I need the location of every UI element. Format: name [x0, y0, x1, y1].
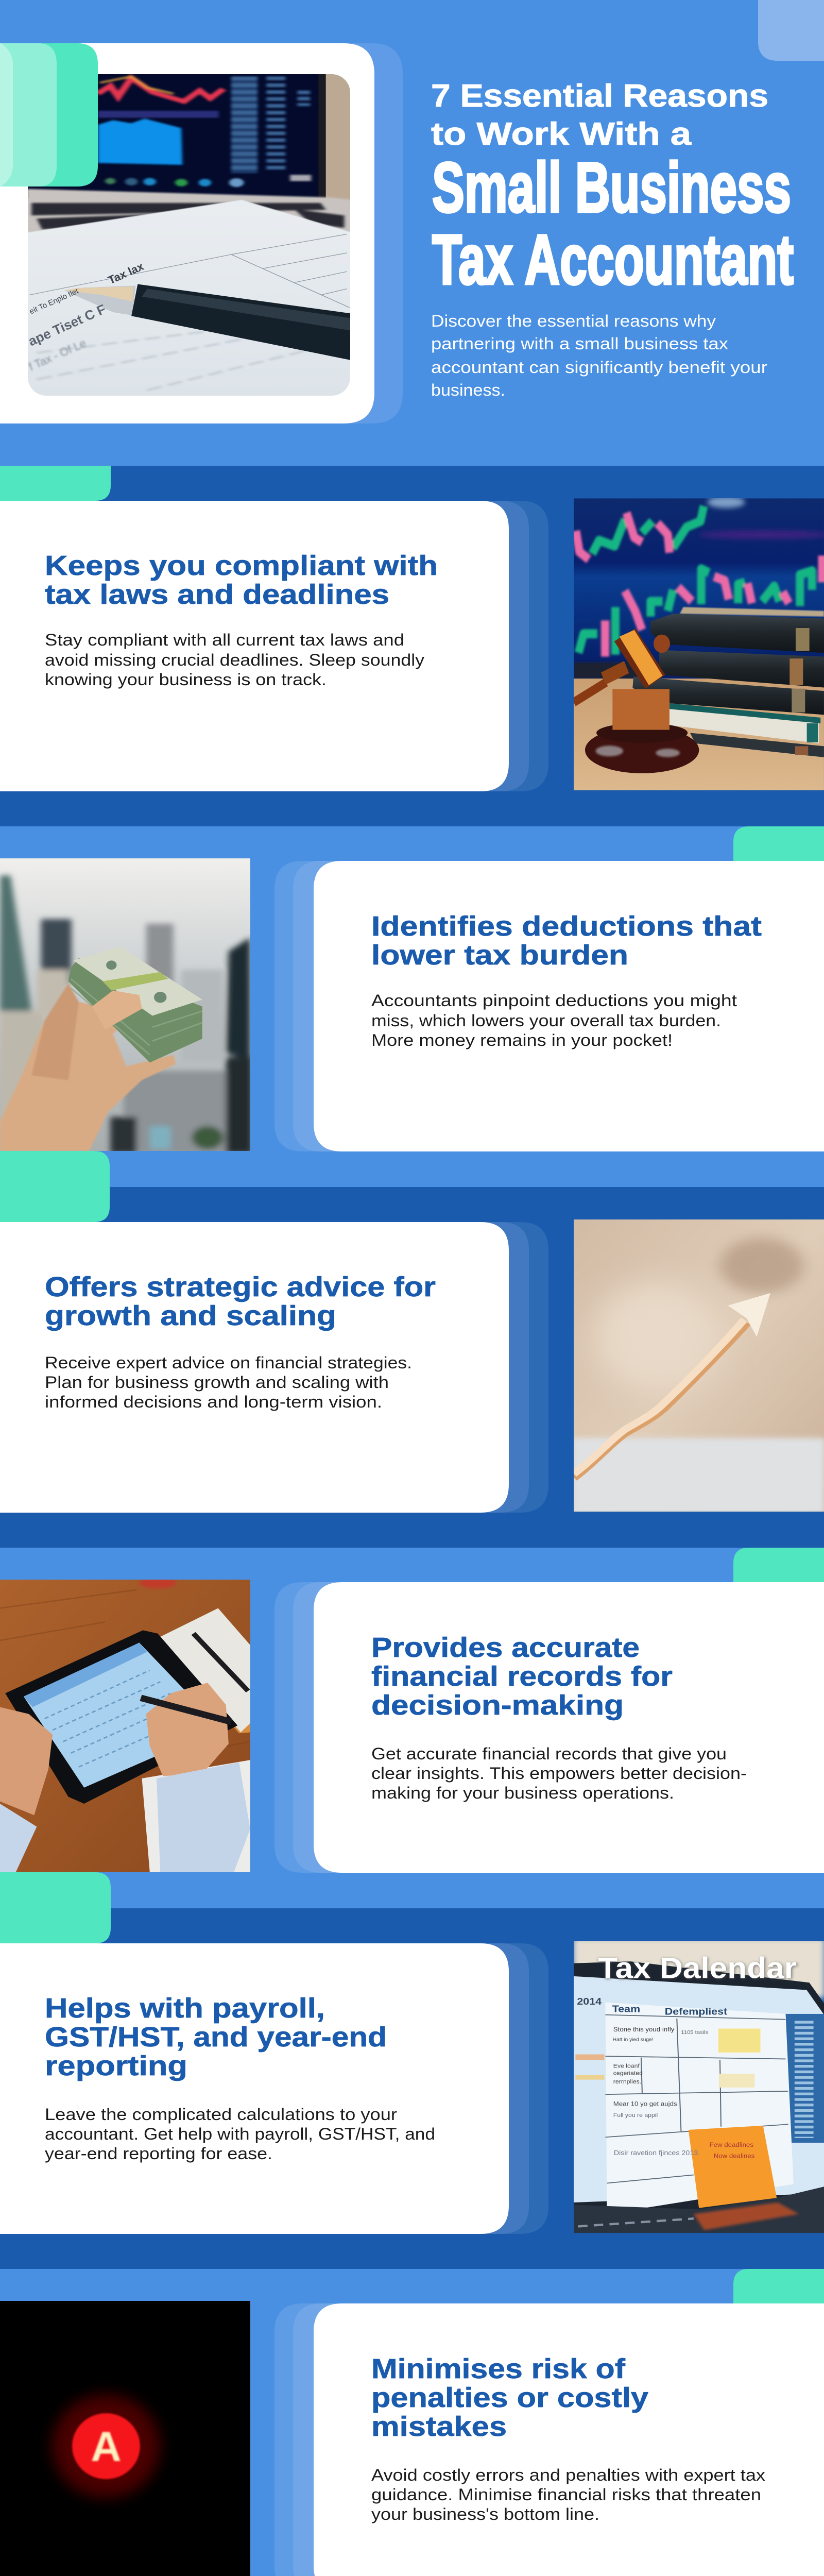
heading: reporting: [45, 2050, 187, 2081]
body text: Get accurate financial records that give you: [371, 1744, 727, 1763]
photo: gavel and books: [574, 497, 824, 790]
heading: mistakes: [371, 2411, 507, 2442]
photo: tax calendar on laptop: [573, 1938, 824, 2235]
heading: Identifies deductions that: [371, 911, 762, 942]
photo: tax calendar on laptop: Now dealines: [714, 2153, 754, 2159]
body text: [45, 1353, 412, 1411]
header description: Discover the essential reasons why: [431, 312, 716, 330]
card: [274, 1582, 824, 1873]
body text: Receive expert advice on financial strategies.: [45, 1353, 412, 1372]
title: [431, 78, 794, 299]
photo: tax calendar on laptop: Tax Dalendar: [598, 1953, 798, 1986]
panel: reason 4: [0, 1548, 824, 1874]
heading: Keeps you compliant with: [45, 550, 438, 581]
heading: [45, 550, 438, 610]
body text: Avoid costly errors and penalties with expert tax: [371, 2466, 765, 2484]
mint tab: [0, 1151, 110, 1222]
heading: Provides accurate: [371, 1632, 640, 1663]
heading: tax laws and deadlines: [45, 579, 389, 610]
title: 7 Essential Reasons: [431, 78, 768, 114]
heading: [371, 1632, 673, 1721]
card: [274, 2303, 824, 2576]
photo: tablet spreadsheet on desk: [0, 1578, 252, 1874]
photo: tax calendar on laptop: Full you re appil: [613, 2113, 658, 2119]
photo: hand holding cash: [0, 858, 252, 1154]
body text: miss, which lowers your overall tax burden.: [371, 1011, 721, 1030]
heading: [371, 2353, 648, 2442]
photo: tax form with pen and laptop: Tax lax: [106, 260, 146, 287]
photo: tax calendar on laptop: Eve loanf: [613, 2063, 640, 2069]
decorative tab: top right: [758, 0, 824, 61]
mint tab: [0, 466, 111, 501]
photo: tax form with pen and laptop: ape Tiset C F: [26, 301, 108, 349]
photo: tax calendar on laptop: Tax Dalendar: [598, 1952, 797, 1985]
body text: your business's bottom line.: [371, 2505, 599, 2523]
heading: Minimises risk of: [371, 2353, 626, 2384]
mint tab: [733, 1548, 824, 1582]
panel: reason 2: [0, 826, 824, 1154]
body text: Plan for business growth and scaling with: [45, 1373, 389, 1392]
panel: header background: [0, 0, 824, 466]
photo: tax calendar on laptop: Mear 10 yo get aujds: [613, 2100, 677, 2107]
heading: lower tax burden: [371, 940, 628, 971]
heading: [45, 1993, 387, 2081]
body text: [371, 1744, 747, 1802]
body text: Stay compliant with all current tax laws and: [45, 631, 404, 649]
card: [274, 861, 824, 1151]
card: [0, 1943, 548, 2234]
photo: tax form with pen and laptop: f Tax - Of Le: [27, 336, 88, 374]
heading: [45, 1272, 436, 1331]
heading: penalties or costly: [371, 2382, 648, 2413]
mint tab: [733, 2269, 824, 2303]
title: to Work With a: [431, 116, 692, 152]
decorative mint tabs: header: [0, 43, 98, 187]
photo: tax calendar on laptop: Team: [612, 2004, 640, 2014]
header description: [431, 312, 767, 399]
photo: tax calendar on laptop: cegeriated: [613, 2071, 643, 2076]
body text: informed decisions and long-term vision.: [45, 1393, 382, 1411]
photo: tax calendar on laptop: Disir ravetion fjinces 2013.: [614, 2149, 700, 2157]
photo: tax form with pen and laptop: [26, 73, 353, 398]
heading: financial records for: [371, 1661, 673, 1692]
panel: reason 3: [0, 1151, 824, 1514]
panel: reason 1: [0, 466, 824, 791]
body text: knowing your business is on track.: [45, 670, 327, 689]
body text: [371, 2466, 765, 2523]
body text: Leave the complicated calculations to your: [45, 2105, 397, 2124]
panel: reason 6: [0, 2269, 824, 2576]
photo: tax form with pen and laptop: eit To Enplo tlet: [28, 286, 80, 316]
photo: tax calendar on laptop: Few deadlines: [710, 2142, 753, 2148]
panel: header image card: [0, 43, 403, 423]
photo: tax calendar on laptop: 1105 tasils: [681, 2030, 708, 2036]
heading: decision-making: [371, 1690, 624, 1721]
body text: [371, 991, 737, 1049]
body text: year-end reporting for ease.: [45, 2144, 272, 2163]
body text: [45, 2105, 435, 2163]
body text: Accountants pinpoint deductions you might: [371, 991, 737, 1010]
card: [0, 501, 548, 791]
photo: rising arrow: [573, 1217, 824, 1514]
photo: tax calendar on laptop: Hatt in yied suge!: [613, 2037, 654, 2042]
heading: GST/HST, and year-end: [45, 2022, 387, 2053]
card: [0, 1222, 548, 1513]
mint tab: [0, 1872, 111, 1943]
photo: tax calendar on laptop: rerrnplies.: [613, 2079, 641, 2085]
heading: Offers strategic advice for: [45, 1272, 436, 1302]
body text: clear insights. This empowers better decision-: [371, 1764, 747, 1783]
header description: partnering with a small business tax: [431, 334, 728, 353]
body text: accountant. Get help with payroll, GST/HST, and: [45, 2125, 435, 2143]
body text: More money remains in your pocket!: [371, 1031, 673, 1049]
photo: red warning light: [0, 2301, 250, 2576]
heading: [371, 911, 762, 971]
body text: guidance. Minimise financial risks that threaten: [371, 2485, 761, 2504]
body text: [45, 631, 424, 689]
panel: reason 5: [0, 1872, 824, 2235]
body text: avoid missing crucial deadlines. Sleep soundly: [45, 651, 424, 669]
photo: tax calendar on laptop: Defempliest: [665, 2007, 728, 2017]
heading: Helps with payroll,: [45, 1993, 325, 2024]
header description: business.: [431, 381, 505, 399]
photo: red warning light: A: [91, 2424, 122, 2470]
header description: accountant can significantly benefit your: [431, 358, 767, 377]
heading: growth and scaling: [45, 1300, 336, 1331]
mint tab: [733, 826, 824, 861]
photo: tax calendar on laptop: 2014: [577, 1996, 602, 2007]
body text: making for your business operations.: [371, 1784, 674, 1802]
photo: tax calendar on laptop: Stone this youd infly: [613, 2026, 675, 2033]
